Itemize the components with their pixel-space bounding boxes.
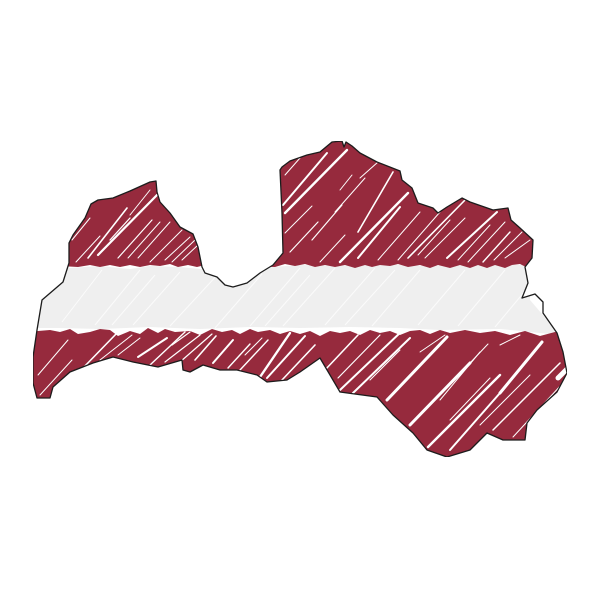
scribble: white strokes on the bottom red band (38, 330, 568, 450)
flag fill clipped to the country (34, 142, 566, 456)
map: Latvia flag scribble (33, 141, 567, 457)
white flag band (20, 264, 560, 335)
top red band (68, 142, 532, 268)
scribble: white strokes on the top red band (72, 150, 530, 262)
bottom red band (34, 328, 566, 456)
scribble: highlights on the grey band (62, 268, 530, 328)
country outline (33, 141, 567, 457)
